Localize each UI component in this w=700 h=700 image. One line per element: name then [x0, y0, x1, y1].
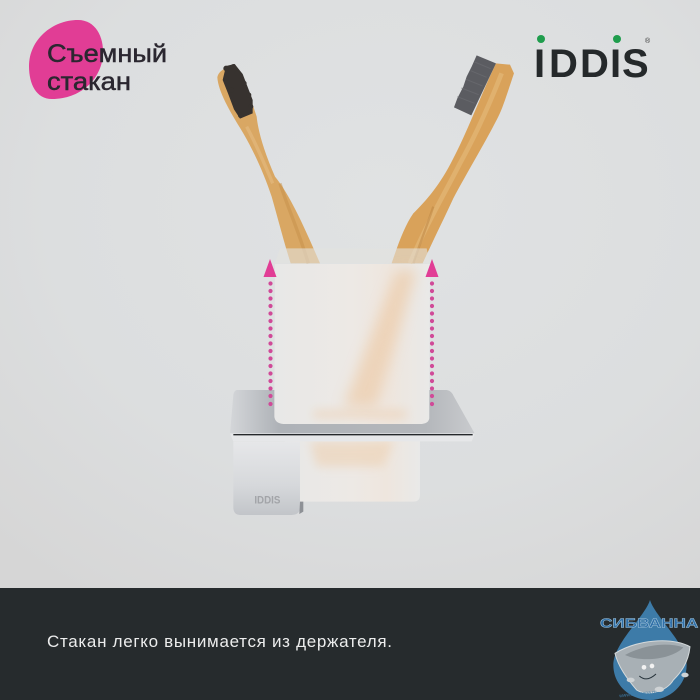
right toothbrush: [392, 55, 514, 263]
holder logo: IDDIS: [254, 494, 280, 506]
heading: [47, 40, 167, 96]
chrome holder: [230, 390, 475, 515]
frosted glass: [274, 248, 430, 502]
left toothbrush: [217, 64, 320, 263]
bottom dark band: [0, 588, 700, 700]
logo: IDDIS: ®: [645, 37, 651, 45]
logo: IDDIS: IDDIS: [534, 42, 649, 86]
right pink arrow: [426, 259, 438, 406]
left pink arrow: [264, 259, 276, 406]
heading: стакан: [47, 68, 131, 96]
caption: Стакан легко вынимается из держателя.: [47, 632, 392, 651]
watermark: Sibvanna: СИБВАННА: [600, 615, 699, 630]
heading: Съемный: [47, 40, 167, 68]
watermark: Sibvanna: www.sibvanna.ru: [619, 689, 657, 699]
watermark: Sibvanna: [600, 600, 699, 700]
pink blob: [29, 20, 103, 99]
